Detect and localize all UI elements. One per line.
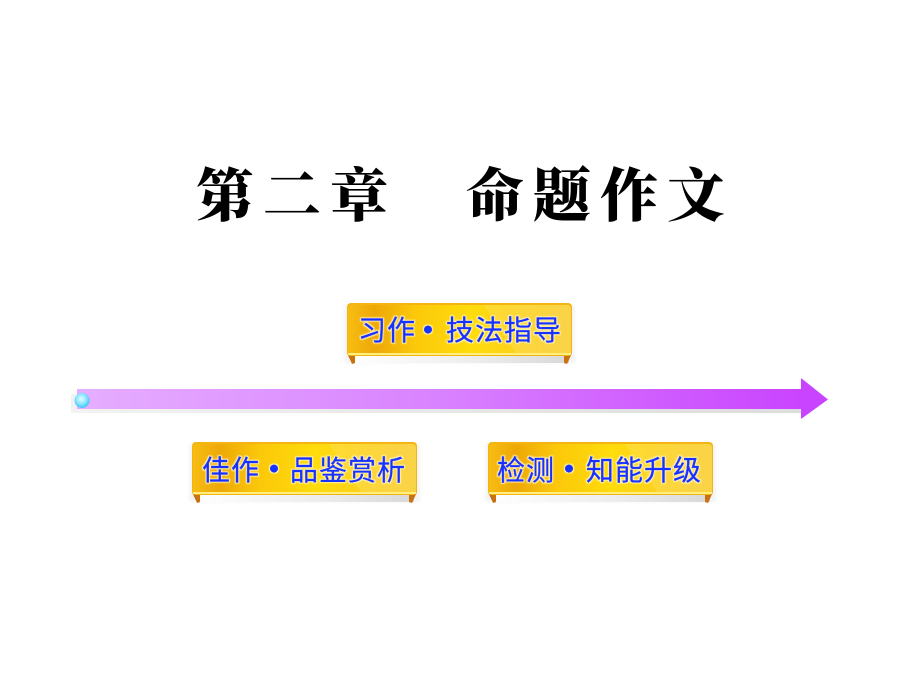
banner: 习作·技法指导 — [344, 303, 575, 364]
title: 第二章 — [196, 164, 388, 229]
banner: 检测·知能升级: 知能升级 — [586, 455, 701, 486]
arrow: timeline — [71, 378, 828, 419]
icon: timeline start ball — [74, 393, 90, 408]
banner: 习作·技法指导: 习作 — [358, 315, 415, 346]
banner: 检测·知能升级: ● — [564, 462, 574, 475]
banner: 检测·知能升级 — [485, 442, 716, 503]
banner: 习作·技法指导: ● — [424, 323, 433, 336]
banner: 佳作·品鉴赏析: ● — [270, 462, 279, 475]
title: 命题作文 — [466, 164, 725, 229]
banner: 习作·技法指导: 技法指导 — [446, 315, 561, 346]
banner: 佳作·品鉴赏析: 佳作 — [202, 455, 259, 486]
banner: 佳作·品鉴赏析 — [189, 442, 420, 503]
banner: 检测·知能升级: 检测 — [497, 455, 554, 486]
banner: 佳作·品鉴赏析: 品鉴赏析 — [290, 455, 405, 486]
title — [196, 164, 725, 229]
